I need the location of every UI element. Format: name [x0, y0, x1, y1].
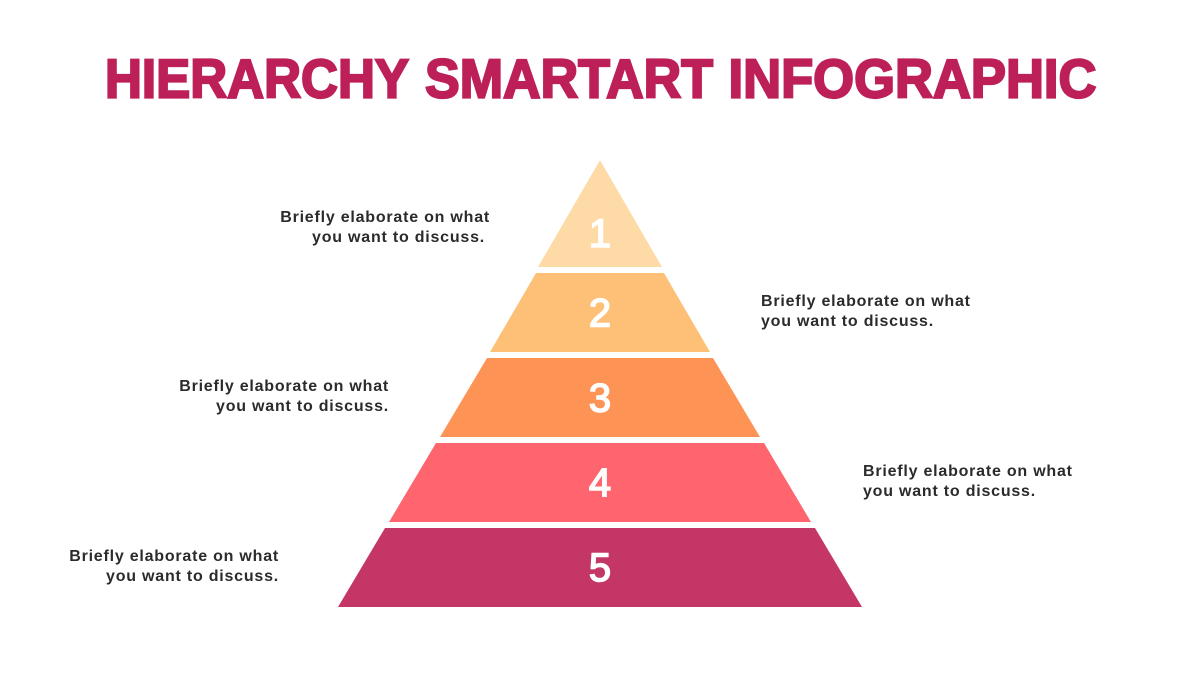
text block 2 [761, 293, 971, 330]
text block 3: Briefly elaborate on what [179, 378, 389, 395]
tier 2 [490, 273, 710, 352]
title: HIERARCHY [105, 48, 409, 110]
text block 5: Briefly elaborate on what [69, 548, 279, 565]
text block 1: you want to discuss. [312, 229, 485, 246]
text block 1: Briefly elaborate on what [280, 209, 490, 226]
tier 1 [538, 160, 662, 267]
title: INFOGRAPHIC [728, 48, 1096, 110]
text block 2: you want to discuss. [761, 313, 934, 330]
tier 3: 3 [589, 376, 611, 420]
text block 3 [179, 378, 389, 415]
tier 4: 4 [589, 461, 611, 505]
text block 4: you want to discuss. [863, 483, 1036, 500]
tier 5: 5 [589, 546, 611, 590]
tier 5 [338, 528, 862, 607]
text block 2: Briefly elaborate on what [761, 293, 971, 310]
text block 5 [69, 548, 279, 585]
title: SMARTART [425, 48, 713, 110]
tier 4 [389, 443, 811, 522]
text block 1 [280, 209, 490, 246]
tier 3 [440, 358, 760, 437]
text block 4: Briefly elaborate on what [863, 463, 1073, 480]
tier 1: 1 [589, 212, 611, 256]
text block 5: you want to discuss. [106, 568, 279, 585]
tier 2: 2 [589, 292, 611, 336]
text block 4 [863, 463, 1073, 500]
title [105, 48, 1096, 110]
text block 3: you want to discuss. [216, 398, 389, 415]
